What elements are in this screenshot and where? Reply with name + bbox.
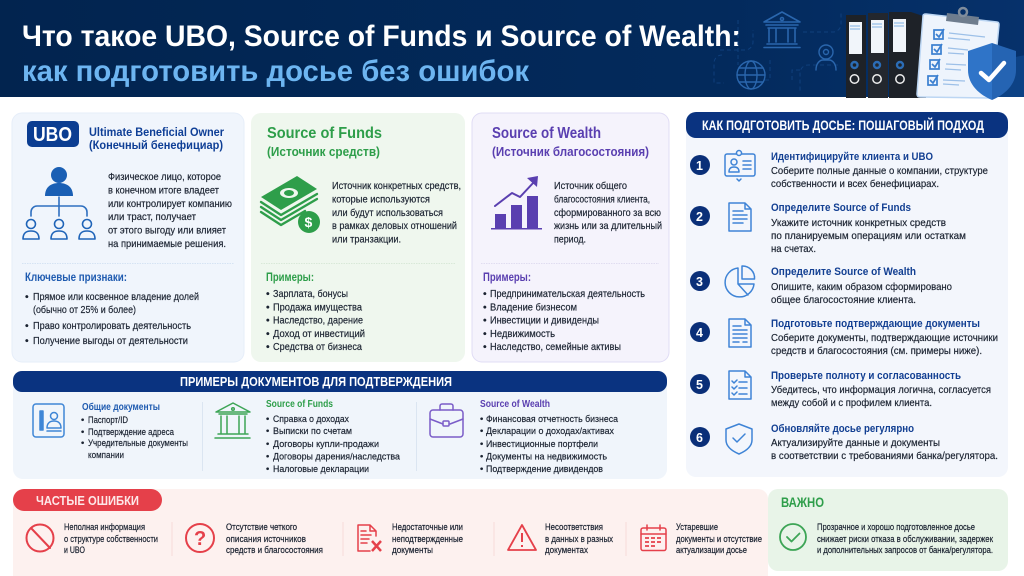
icon: globe <box>737 61 765 89</box>
Source of Wealth documents: • <box>480 439 483 450</box>
key features list: • <box>25 291 29 303</box>
mistake 2: ? <box>194 528 206 550</box>
examples list: Доход от инвестиций <box>273 328 365 340</box>
examples list: Владение бизнесом <box>490 302 577 314</box>
Source of Funds documents: • <box>266 452 269 462</box>
UBO description: в конечном итоге владеет <box>108 184 219 196</box>
Source of Funds documents: Source of Funds <box>266 399 333 410</box>
general documents: • <box>81 438 84 449</box>
icon: shield <box>968 43 1016 100</box>
step 3: Опишите, каким образом сформировано <box>771 281 952 293</box>
icon: person <box>816 45 836 70</box>
Source of Wealth heading: (Источник благосостояния) <box>492 145 649 159</box>
important text: и дополнительных запросов от банка/регулятора. <box>817 545 993 555</box>
title <box>22 20 741 88</box>
Source of Funds documents: Договоры дарения/наследства <box>273 452 401 462</box>
step 5: между собой и с профилем клиента. <box>771 397 932 409</box>
icon: green bank <box>215 403 250 438</box>
icon: passport <box>33 404 64 437</box>
step 5: Убедитесь, что информация логична, согласуется <box>771 384 991 396</box>
step 1: 1 <box>696 159 703 173</box>
step 2: 2 <box>696 210 703 224</box>
panel: important note <box>768 489 1008 571</box>
step 2: Укажите источник конкретных средств <box>771 217 946 229</box>
examples list: Наследство, семейные активы <box>490 341 621 353</box>
key features list: Получение выгоды от деятельности <box>33 335 188 347</box>
Source of Funds documents: Выписки по счетам <box>273 426 352 437</box>
panel: step-by-step approach <box>686 112 1008 477</box>
general documents <box>81 401 188 461</box>
general documents: Общие документы <box>82 401 160 413</box>
step 3: 3 <box>696 275 703 289</box>
panel: Source of Wealth <box>472 113 669 362</box>
step 1: Соберите полные данные о компании, структуре <box>771 165 988 177</box>
important heading: ВАЖНО <box>781 495 824 510</box>
UBO description: от этого выгоду или влияет <box>108 224 226 236</box>
step 4: 4 <box>696 326 703 340</box>
panel: Source of Funds <box>251 113 465 362</box>
key features list: (обычно от 25% и более) <box>33 304 136 316</box>
mistake 4: документах <box>545 545 588 555</box>
step 3: Определите Source of Wealth <box>771 266 916 278</box>
step 6: 6 <box>696 431 703 445</box>
step 4: Подготовьте подтверждающие документы <box>771 318 980 330</box>
mistake 5: Устаревшие <box>676 522 718 532</box>
examples list <box>266 288 365 353</box>
UBO description: или траст, получает <box>108 211 196 223</box>
key features list: Право контролировать деятельность <box>33 320 191 332</box>
mistake 5: документы и отсутствие <box>676 534 762 544</box>
step 1 <box>690 150 988 190</box>
step 1: собственности и всех бенефициарах. <box>771 178 939 190</box>
Source of Funds description: которые используются <box>332 194 430 206</box>
mistake 2 <box>186 522 323 555</box>
general documents: Подтверждение адреса <box>88 427 175 438</box>
title: как подготовить досье без ошибок <box>22 55 529 88</box>
examples list: • <box>266 341 270 353</box>
mistake 1: и UBO <box>64 545 85 555</box>
documents heading: ПРИМЕРЫ ДОКУМЕНТОВ ДЛЯ ПОДТВЕРЖДЕНИЯ <box>180 374 452 389</box>
mistake 1 <box>26 522 158 555</box>
Source of Funds documents <box>266 399 401 475</box>
examples list: Продажа имущества <box>273 302 362 314</box>
icon: binders <box>846 12 926 98</box>
Source of Wealth description <box>554 180 662 246</box>
step 2: на счетах. <box>771 243 816 255</box>
icon: ownership structure <box>23 167 95 239</box>
UBO heading: Ultimate Beneficial Owner <box>89 125 224 139</box>
mistake 5: актуализации досье <box>676 545 747 555</box>
examples list: • <box>483 341 487 353</box>
mistake 2: средств и благосостояния <box>226 545 323 555</box>
Source of Wealth description: сформированного за всю <box>554 207 661 219</box>
step 6: Актуализируйте данные и документы <box>771 437 940 449</box>
Source of Funds documents: Справка о доходах <box>273 414 349 425</box>
Source of Funds documents: Договоры купли-продажи <box>273 439 379 450</box>
examples list: • <box>266 302 270 314</box>
step 5 <box>690 370 991 409</box>
UBO heading: (Конечный бенефициар) <box>89 138 223 152</box>
important text: Прозрачное и хорошо подготовленное досье <box>817 522 975 532</box>
examples list: • <box>266 288 270 300</box>
Source of Wealth documents: Документы на недвижимость <box>486 452 607 462</box>
UBO description: или контролирует компанию <box>108 198 232 210</box>
UBO badge: UBO <box>33 124 72 146</box>
key features heading: Ключевые признаки: <box>25 272 127 284</box>
step 6: в соответствии с требованиями банка/регулятора. <box>771 450 998 462</box>
step 4: Соберите документы, подтверждающие источники <box>771 332 998 344</box>
Source of Funds heading: (Источник средств) <box>267 145 380 159</box>
Source of Funds documents: Налоговые декларации <box>273 464 369 475</box>
mistake 2: описания источников <box>226 534 306 544</box>
step 1: Идентифицируйте клиента и UBO <box>771 151 933 163</box>
Source of Wealth documents: Инвестиционные портфели <box>486 439 598 450</box>
examples list: Предпринимательская деятельность <box>490 288 645 300</box>
Source of Wealth documents: • <box>480 414 483 425</box>
mistake 2: Отсутствие четкого <box>226 522 297 532</box>
Source of Funds description <box>332 180 461 246</box>
decorative network lines <box>714 12 841 93</box>
mistake 4: Несоответствия <box>545 522 603 532</box>
UBO heading <box>89 125 224 152</box>
mistake 1: Неполная информация <box>64 522 145 532</box>
key features list: Прямое или косвенное владение долей <box>33 291 199 303</box>
general documents: Учредительные документы <box>88 438 188 449</box>
UBO description: на принимаемые решения. <box>108 238 226 250</box>
UBO description <box>108 171 232 250</box>
key features list: • <box>25 335 29 347</box>
Source of Wealth description: благосостояния клиента, <box>554 194 650 206</box>
general documents: • <box>81 415 84 426</box>
examples list: • <box>483 302 487 314</box>
examples list: Инвестиции и дивиденды <box>490 314 599 326</box>
examples list: Средства от бизнеса <box>273 341 362 353</box>
mistake 3: неподтвержденные <box>392 534 463 544</box>
step 3 <box>690 266 952 306</box>
examples list: • <box>483 288 487 300</box>
Source of Wealth description: Источник общего <box>554 180 627 192</box>
step 5: 5 <box>696 378 703 392</box>
examples list: Недвижимость <box>490 328 555 340</box>
title: Что такое UBO, Source of Funds и Source of Wealth: <box>22 20 741 53</box>
mistake 3 <box>358 522 463 555</box>
Source of Funds heading: Source of Funds <box>267 125 382 142</box>
step 2: по планируемым операциям или остаткам <box>771 230 966 242</box>
header banner <box>0 0 1024 100</box>
Source of Wealth documents: Финансовая отчетность бизнеса <box>486 414 619 425</box>
Source of Wealth documents: • <box>480 464 483 475</box>
general documents: компании <box>88 450 124 461</box>
Source of Wealth heading: Source of Wealth <box>492 125 601 142</box>
step 5: Проверьте полноту и согласованность <box>771 370 961 382</box>
Source of Funds description: в рамках деловых отношений <box>332 220 457 232</box>
panel: document examples <box>13 371 667 479</box>
Source of Funds description: или транзакции. <box>332 234 401 246</box>
mistake 3: документы <box>392 545 433 555</box>
steps heading <box>686 112 1008 138</box>
Source of Funds documents: • <box>266 439 269 450</box>
icon: briefcase <box>430 404 463 437</box>
examples list: Наследство, дарение <box>273 314 363 326</box>
Source of Funds description: Источник конкретных средств, <box>332 180 461 192</box>
mistake 5 <box>641 522 762 555</box>
examples heading: Примеры: <box>266 272 314 284</box>
Source of Wealth documents: Source of Wealth <box>480 399 550 410</box>
mistake 3: Недостаточные или <box>392 522 463 532</box>
examples list: • <box>266 314 270 326</box>
UBO description: Физическое лицо, которое <box>108 171 221 183</box>
Source of Wealth documents: • <box>480 426 483 437</box>
Source of Funds description: или будут использоваться <box>332 207 443 219</box>
icon: bank <box>764 12 800 48</box>
Source of Funds heading <box>267 125 382 159</box>
Source of Wealth description: жизнь или за длительный <box>554 220 662 232</box>
step 6: Обновляйте досье регулярно <box>771 423 914 435</box>
examples list: • <box>266 328 270 340</box>
mistake 1: о структуре собственности <box>64 534 158 544</box>
Source of Wealth documents <box>480 399 619 475</box>
Source of Wealth description: период. <box>554 234 586 246</box>
Source of Wealth documents: Подтверждение дивидендов <box>486 464 603 475</box>
examples list <box>483 288 645 353</box>
Source of Funds documents: • <box>266 464 269 475</box>
important text: снижает риски отказа в обслуживании, задержек <box>817 534 993 544</box>
Source of Wealth documents: • <box>480 452 483 462</box>
panel: common mistakes <box>13 489 768 576</box>
general documents: Паспорт/ID <box>88 415 128 426</box>
key features list: • <box>25 320 29 332</box>
mistake 4 <box>508 522 613 555</box>
mistakes heading: ЧАСТЫЕ ОШИБКИ <box>36 494 139 508</box>
key features list <box>25 291 199 347</box>
icon: check circle <box>780 524 806 550</box>
general documents: • <box>81 427 84 438</box>
Source of Funds documents: • <box>266 426 269 437</box>
Source of Wealth heading <box>492 125 649 159</box>
step 4 <box>690 318 998 357</box>
icon: money stack: $ <box>304 214 312 230</box>
icon: clipboard checklist <box>917 8 999 98</box>
Source of Wealth documents: Декларации о доходах/активах <box>486 426 614 437</box>
important text <box>817 522 993 555</box>
icon: money stack <box>261 176 320 233</box>
step 4: средств и благосостояния (см. примеры ниже). <box>771 345 982 357</box>
step 2: Определите Source of Funds <box>771 202 911 214</box>
examples list: • <box>483 328 487 340</box>
examples list: • <box>483 314 487 326</box>
examples heading: Примеры: <box>483 272 531 284</box>
mistake 4: в данных в разных <box>545 534 613 544</box>
examples list: Зарплата, бонусы <box>273 288 348 300</box>
step 2 <box>690 202 966 255</box>
step 3: общее благосостояние клиента. <box>771 294 916 306</box>
Source of Funds documents: • <box>266 414 269 425</box>
step 6 <box>690 423 998 462</box>
icon: growth chart <box>491 176 542 230</box>
mistakes heading <box>13 489 162 511</box>
panel: UBO <box>12 113 244 362</box>
documents heading <box>13 371 667 392</box>
